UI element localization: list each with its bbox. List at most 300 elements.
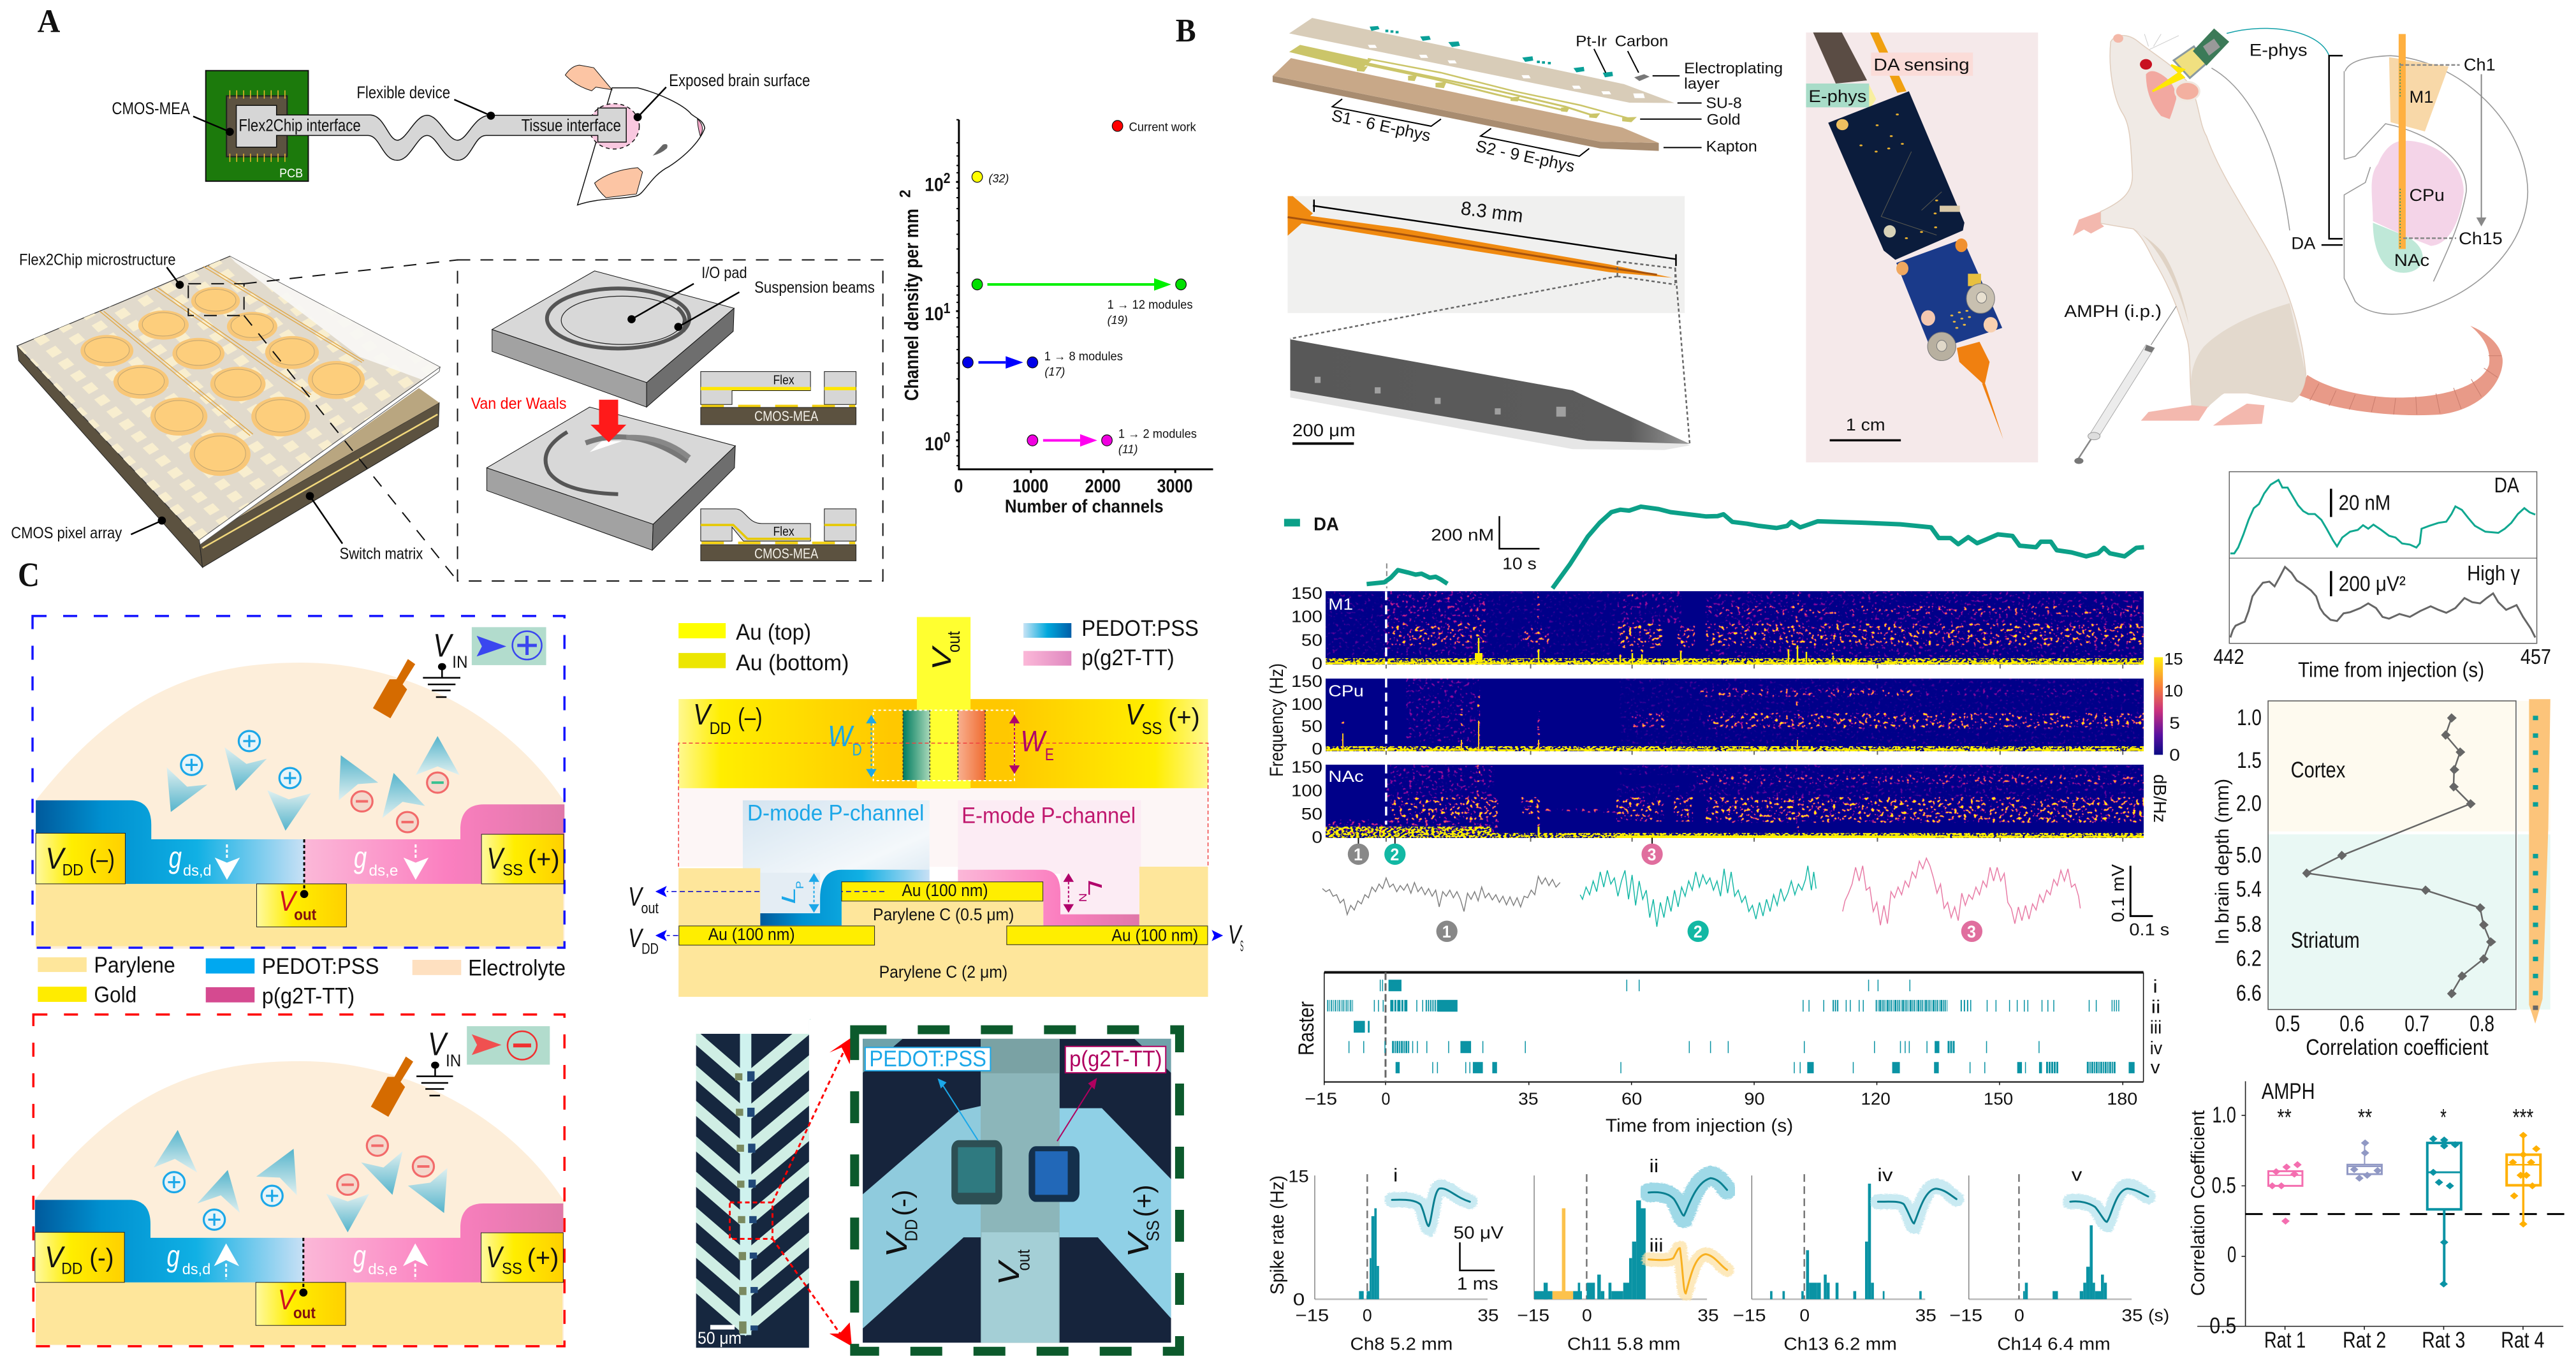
Vout label: out: [294, 905, 317, 923]
VDD terminal arrow: V: [628, 923, 643, 953]
label CMOS-MEA: [112, 99, 234, 136]
waveform labels: iii: [1649, 1235, 1664, 1256]
y axis tick labels: 0: [944, 430, 950, 446]
trace labels and scale bars: [2331, 474, 2520, 596]
waveform labels: [1393, 1156, 2082, 1256]
spectrogram NAc: [1326, 765, 2144, 838]
legend: materials: Parylene: [94, 952, 175, 978]
legend: materials: Gold: [94, 982, 136, 1007]
region labels: Cortex: [2291, 757, 2346, 783]
rotated terminal labels: SS: [1143, 1220, 1163, 1241]
chart: DA trace: DA: [1314, 514, 1339, 534]
VSS label: V: [487, 842, 506, 876]
depth tick labels: 5.4: [2236, 876, 2262, 902]
rat head with exposed brain: [566, 65, 705, 205]
rotated terminal labels: V: [1122, 1230, 1155, 1258]
cross-section labels: Au (100 nm): [1111, 926, 1198, 945]
raster plot: [1305, 973, 2162, 1136]
DA trace: [2230, 480, 2535, 554]
x axis title: Number of channels: [1005, 497, 1164, 517]
electrode icon: [373, 659, 415, 718]
probe track: [2399, 34, 2406, 249]
VSS label: [486, 1240, 559, 1277]
channel labels: Ch13 6.2 mm: [1783, 1334, 1897, 1354]
LP dimension: [779, 873, 819, 913]
y axis tick labels: 1: [944, 300, 950, 316]
frequency tick labels M1: 0: [1312, 654, 1322, 673]
histogram tick labels: −15: [1949, 1305, 1982, 1325]
depth tick labels: 6.6: [2236, 980, 2262, 1006]
Kapton layer: [1273, 58, 1658, 151]
DA line: [1366, 506, 2144, 589]
label Flexible device: Flexible device: [356, 83, 450, 102]
trace labels and scale bars: 20 nM: [2339, 492, 2390, 515]
rotated terminal labels: (-): [888, 1190, 918, 1216]
VSS label: SS: [1142, 719, 1162, 739]
channel conductance gds,d: ds,d: [183, 862, 212, 879]
E-mode channel region: E-mode P-channel: [962, 803, 1136, 828]
VIN ground symbol: [423, 627, 467, 697]
channel conductance gds,e: [353, 1240, 428, 1279]
significance stars: **: [2358, 1105, 2372, 1131]
atlas labels and leaders: M1: [2409, 87, 2433, 107]
dimension 8.3 mm line: [1313, 200, 1676, 266]
x axis tick labels: [954, 475, 1193, 497]
label CMOS pixel array: [11, 517, 166, 541]
spike rate histograms: [1288, 1156, 2169, 1354]
frequency tick labels NAc: 50: [1301, 805, 1322, 823]
VDD label: V: [693, 698, 713, 731]
label I/O pad: I/O pad: [701, 264, 747, 282]
depth tick labels: 5.0: [2236, 842, 2262, 867]
panel letter B: B: [1176, 12, 1196, 48]
box plot: correlation per rat: [2197, 1078, 2565, 1353]
legend: Au and polymers: Au (bottom): [736, 650, 849, 675]
channel conductance gds,e: ds,e: [368, 1260, 397, 1278]
VDD terminal arrow: DD: [641, 939, 659, 957]
E-phys cable and DA lead: [2211, 28, 2329, 230]
panel C: negative input circuit schematic: [33, 1015, 564, 1346]
chart: DA trace: [1284, 506, 2144, 589]
y axis tick labels: 10: [925, 433, 944, 455]
rat body: [2100, 36, 2306, 407]
waveform iv: [1878, 1186, 1956, 1226]
axes: [956, 120, 1213, 473]
histogram tick labels: 35: [2121, 1305, 2143, 1325]
rat tail: [2297, 326, 2503, 415]
labels S1, S2, 8.3 mm: 8.3 mm: [1460, 198, 1525, 227]
significance stars: [2277, 1105, 2533, 1131]
frequency tick labels CPu: 0: [1312, 740, 1322, 758]
VSS label: (+): [1168, 703, 1200, 732]
Vout terminal arrow: [628, 882, 884, 916]
frequency tick labels CPu: 100: [1291, 695, 1322, 714]
ion drift arrows: [166, 736, 460, 831]
time axis labels: [2213, 646, 2551, 682]
text: S: [1240, 937, 1243, 955]
unit iv: [1349, 1041, 2039, 1053]
panel B: headstage photo: [1806, 33, 2038, 462]
VSS label: [1125, 698, 1200, 739]
region labels: M1: [1328, 596, 1353, 614]
rat head details: [2113, 34, 2199, 119]
box Rat 1: [2268, 1161, 2302, 1225]
pad suspension rings: [85, 289, 360, 471]
zoom box dashes: [188, 260, 883, 581]
label Flex2Chip microstructure: [19, 251, 184, 289]
frequency tick labels NAc: [1291, 758, 1322, 846]
annotation labels: 1 → 8 modules: [1044, 349, 1123, 364]
threshold dashed line: [2246, 1213, 2565, 1215]
frequency tick labels M1: 100: [1291, 608, 1322, 626]
screws: [1928, 284, 1994, 361]
box Rat 3: [2427, 1135, 2461, 1288]
frequency tick labels M1: [1291, 585, 1322, 673]
orange unit iii bars: [1553, 1209, 1573, 1299]
cross-section labels: Parylene C (2 μm): [879, 963, 1007, 982]
VDD label: (–): [738, 703, 763, 732]
cross-section: before contact: CMOS-MEA: [754, 408, 819, 424]
layer labels and leaders: Pt-Ir: [1576, 33, 1607, 50]
anion symbols: [351, 772, 448, 832]
legend: Au and polymers: PEDOT:PSS: [1081, 615, 1199, 641]
brackets S1 S2: [1332, 99, 1589, 156]
LP dimension: L: [779, 887, 800, 904]
Vout label: V: [279, 885, 298, 917]
rotated terminal labels: (+): [1129, 1185, 1159, 1217]
label E-phys: E-phys: [2250, 40, 2308, 59]
trace badges: 2: [1694, 922, 1702, 941]
unit labels: v: [2151, 1057, 2160, 1077]
WD dimension: W: [828, 719, 854, 753]
VSS terminal arrow: [1211, 920, 1243, 955]
NAc region: [2373, 223, 2423, 273]
raster tick labels: 0: [1381, 1089, 1390, 1109]
box Rat 4: [2506, 1132, 2540, 1228]
interconnect tracks: [99, 266, 364, 436]
legend: Au and polymers: p(g2T-TT): [1081, 645, 1175, 670]
channel conductance gds,d: g: [169, 841, 182, 875]
depth tick labels: 1.5: [2237, 747, 2262, 773]
labels S1, S2, 8.3 mm: [1330, 106, 1577, 227]
VIN ground symbol: V: [433, 627, 454, 663]
frequency tick labels M1: 150: [1291, 585, 1322, 603]
x axis tick labels: 0: [954, 475, 963, 497]
x axis tick labels: 1000: [1013, 475, 1048, 497]
gold traces layer: [1289, 45, 1637, 122]
correlation tick labels and title: 0.6: [2339, 1011, 2364, 1036]
y axis title: depth: In brain depth (mm): [2212, 779, 2233, 945]
label Switch matrix: [306, 492, 423, 563]
VDD label: V: [45, 842, 66, 876]
raster tick labels: 120: [1861, 1089, 1891, 1109]
cross-section: after contact: [701, 509, 856, 561]
atlas labels and leaders: CPu: [2409, 186, 2445, 205]
annotation labels: (19): [1108, 314, 1128, 327]
colorbar: 5: [2169, 714, 2180, 732]
colorbar: 10: [2164, 682, 2183, 700]
waveform v: [2070, 1186, 2148, 1225]
region backgrounds: [2268, 701, 2550, 1010]
y axis title: 2: [896, 189, 914, 198]
scale bar 50 um: 50 μm: [698, 1329, 742, 1348]
SEM image of probe tip: [1290, 339, 1690, 450]
VSS label: (+): [528, 844, 560, 873]
histogram tick labels: −15: [1295, 1305, 1329, 1325]
x axis tick labels: 3000: [1157, 475, 1193, 497]
callout p(g2T-TT): p(g2T-TT): [1069, 1046, 1162, 1071]
significance stars: **: [2277, 1105, 2292, 1131]
y axis tick labels: 10: [925, 303, 944, 325]
channel span arrow: [2399, 65, 2486, 238]
rat labels: Rat 3: [2422, 1327, 2465, 1353]
arrow: Van der Waals: [590, 400, 626, 442]
correlation tick labels and title: [2276, 1011, 2494, 1060]
time axis labels: Time from injection (s): [2298, 659, 2484, 682]
colorbar title: dB/Hz: [2150, 774, 2170, 823]
histogram tick labels: 15: [1288, 1166, 1309, 1186]
cross-section labels: Au (100 nm): [902, 881, 988, 901]
histogram tick labels: −15: [1517, 1305, 1549, 1325]
legend: positive input: [472, 627, 546, 665]
anion symbols: [337, 1136, 434, 1195]
label Suspension beams: Suspension beams: [754, 278, 875, 297]
histogram tick labels: 0: [2014, 1305, 2024, 1325]
VDD label: [45, 842, 115, 879]
unit labels: ii: [2151, 997, 2160, 1017]
E-phys label: [1806, 84, 1869, 107]
Flex2Chip pads: [80, 287, 365, 476]
panel B: rat with implant and brain atlas: [2064, 28, 2528, 464]
histogram Ch8: [1359, 1209, 1379, 1299]
tick labels: [2209, 1102, 2236, 1338]
LN dimension: L: [1084, 880, 1106, 897]
x axis tick labels: 2000: [1085, 475, 1121, 497]
time markers 1 2 3: [1348, 838, 1663, 865]
channel labels: [1350, 1334, 2111, 1354]
correlation tick labels and title: 0.5: [2276, 1011, 2300, 1036]
correlation vs depth chart: [2236, 699, 2550, 1060]
histogram tick labels: 0: [1363, 1305, 1372, 1325]
atlas labels and leaders: NAc: [2394, 251, 2429, 270]
DA and high gamma comparison: [2213, 472, 2551, 682]
scale bar 1 cm: 1 cm: [1846, 415, 1885, 434]
rat labels: Rat 1: [2264, 1327, 2306, 1353]
Vout rotated label: out: [943, 631, 963, 652]
colorbar: 0: [2169, 746, 2180, 764]
box Rat 2: [2348, 1140, 2382, 1182]
depth tick labels: [2236, 705, 2262, 1006]
spectrogram M1: [1326, 591, 2144, 665]
rotated terminal labels: [880, 1185, 1163, 1286]
high gamma trace: [2230, 567, 2535, 638]
histogram tick labels: 35: [1477, 1305, 1499, 1325]
cross-section: before contact: [701, 372, 856, 425]
trace labels and scale bars: DA: [2494, 474, 2520, 497]
frequency tick labels CPu: [1291, 672, 1322, 758]
layer labels and leaders: layer: [1684, 75, 1720, 92]
LFP scale bar: 0.1 s: [2129, 920, 2169, 939]
LFP trace 2: [1580, 866, 1816, 927]
channel conductance gds,d: g: [166, 1240, 180, 1273]
D-mode channel region: [743, 800, 930, 883]
LN dimension: N: [1077, 893, 1088, 902]
waveform i: [1392, 1187, 1470, 1228]
E-mode channel region: [958, 800, 1141, 874]
waveform labels: ii: [1649, 1156, 1658, 1176]
Vout rotated label: V: [927, 645, 957, 670]
CPu region: [2372, 141, 2464, 246]
raster tick labels: 90: [1744, 1089, 1765, 1109]
label Flexible device: [356, 83, 495, 120]
injection markers: [1385, 591, 1387, 825]
head implant: [2153, 29, 2229, 91]
label CMOS-MEA: CMOS-MEA: [112, 99, 190, 118]
waveform iii: [1649, 1248, 1727, 1293]
red zoom box and arrows: [730, 1038, 852, 1346]
tick labels: 0.5: [2212, 1172, 2236, 1198]
chart: channel density vs number of channels: [896, 12, 1213, 517]
y axis title: Spike rate: Spike rate (Hz): [1267, 1175, 1288, 1295]
micrograph: transistor array: [687, 1020, 819, 1354]
cation symbols: [181, 731, 300, 788]
rat labels: [2264, 1327, 2544, 1353]
label Exposed brain surface: Exposed brain surface: [669, 71, 810, 90]
correlation tick labels and title: Correlation coefficient: [2306, 1034, 2489, 1060]
VDD label: [45, 1240, 114, 1277]
spike rate histograms: 50 μV: [1453, 1223, 1504, 1242]
label Flex2Chip interface: Flex2Chip interface: [238, 116, 361, 135]
x ticks: [1386, 665, 2123, 842]
trace badges: 3: [1967, 922, 1976, 941]
rotated terminal labels: DD: [901, 1219, 921, 1241]
DA legend: [1284, 514, 1339, 534]
atlas labels and leaders: [2291, 55, 2503, 270]
E-phys label: E-phys: [1808, 87, 1866, 106]
PCB with CMOS-MEA chip: [206, 71, 308, 181]
legend: Au and polymers: Au (top): [736, 619, 811, 645]
layer labels and leaders: Carbon: [1615, 33, 1668, 50]
tick labels: 0.5: [2209, 1313, 2236, 1338]
top view of gold electrodes: [678, 617, 1208, 867]
atlas labels and leaders: Ch1: [2464, 55, 2496, 74]
colorbar: 15: [2164, 650, 2183, 668]
cross-section: before contact: Flex: [773, 372, 794, 387]
VSS label: V: [486, 1240, 504, 1274]
cross-section stack: [678, 867, 1208, 997]
layer labels and leaders: Electroplating: [1684, 59, 1783, 77]
annotation labels: 1 → 2 modules: [1118, 427, 1197, 441]
cross-section labels: Au (100 nm): [708, 925, 795, 945]
VIN ground symbol: IN: [446, 1052, 461, 1070]
label Switch matrix: Switch matrix: [340, 545, 423, 563]
y axis tick labels: [925, 170, 950, 455]
histogram tick labels: 0: [1582, 1305, 1592, 1325]
cross-section labels: Parylene C (0.5 μm): [873, 906, 1014, 925]
trace labels and scale bars: 200 μV²: [2339, 573, 2406, 596]
Vout label: [279, 885, 317, 923]
ion drift arrows: [154, 1130, 448, 1232]
WE dimension: [1009, 715, 1054, 774]
Vout label: V: [278, 1283, 297, 1316]
upper microstructure block: [492, 271, 734, 407]
circuit boards: [1828, 91, 2002, 351]
label Van der Waals: Van der Waals: [471, 394, 566, 413]
spectrogram axes, colorbar and LFP traces: [1291, 585, 2183, 942]
text: iii: [2150, 1017, 2162, 1038]
raster tick labels: 35: [1518, 1089, 1539, 1109]
scale label 0.1 mV: 0.1 mV: [2108, 864, 2128, 922]
histogram tick labels: [1288, 1166, 2169, 1325]
trace badges: [1437, 921, 1982, 942]
depth tick labels: 6.2: [2236, 945, 2262, 971]
channel conductance gds,e: ds,e: [369, 862, 398, 879]
cross-section: after contact: CMOS-MEA: [754, 545, 819, 561]
M1 region: [2389, 57, 2448, 131]
VSS terminal arrow: V: [1228, 920, 1243, 949]
layer labels and leaders: [1576, 33, 1783, 155]
atlas labels and leaders: Ch15: [2459, 229, 2503, 248]
waveform labels: i: [1393, 1165, 1398, 1186]
annotation labels: Current work: [1129, 120, 1196, 134]
histogram tick labels: 0: [1799, 1305, 1810, 1325]
y axis title: correlation: Correlation Coefficient: [2188, 1110, 2209, 1296]
unit v: [1396, 1062, 2135, 1073]
layer labels and leaders: Gold: [1707, 111, 1740, 128]
channel conductance gds,e: g: [354, 841, 367, 875]
label Suspension beams: [674, 278, 875, 331]
correlation tick labels and title: 0.8: [2470, 1011, 2494, 1036]
scale bar 200 nM / 10 s: [1431, 516, 1539, 573]
raster tick labels: 60: [1621, 1089, 1642, 1109]
y axis title: Frequency: Frequency (Hz): [1266, 663, 1287, 777]
cables: [1813, 33, 1906, 107]
lower microstructure block: [487, 407, 735, 550]
panel letter A: A: [38, 3, 61, 40]
device stack: sheet over CMOS pixel array: [17, 256, 440, 568]
legend: materials: [38, 952, 566, 1008]
VDD label: [693, 698, 763, 739]
histogram tick labels: 35: [1697, 1305, 1719, 1325]
label Tissue interface: Tissue interface: [522, 116, 621, 135]
text: iv: [2150, 1038, 2162, 1058]
VIN ground symbol: IN: [452, 653, 467, 672]
region labels: Striatum: [2291, 927, 2360, 953]
panel C: device layout and cross-section: [628, 615, 1243, 1354]
Vout terminal arrow: V: [628, 882, 643, 911]
raster plot: Time from injection (s): [1606, 1115, 1793, 1136]
DA sensing label: DA sensing: [1873, 55, 1970, 74]
panel A: flexible interface schematic: [11, 3, 883, 581]
channel labels: Ch11 5.8 mm: [1567, 1334, 1680, 1354]
scale bar 1 cm: [1830, 415, 1901, 441]
rotated terminal labels: V: [992, 1259, 1025, 1286]
waveform labels: iv: [1877, 1165, 1892, 1186]
raster tick labels: 150: [1984, 1089, 2013, 1109]
channel conductance gds,d: ds,d: [182, 1260, 210, 1278]
spectrogram CPu: [1326, 679, 2144, 751]
VDD label: DD: [62, 860, 84, 879]
time markers 1 2 3: 2: [1390, 845, 1399, 864]
unit iii: [1354, 1021, 1370, 1033]
histogram tick labels: 35: [1915, 1305, 1936, 1325]
rotated terminal labels: V: [880, 1230, 913, 1258]
callout PEDOT:PSS: PEDOT:PSS: [869, 1046, 986, 1071]
VDD label: V: [45, 1240, 66, 1274]
callout p(g2T-TT): [1057, 1046, 1166, 1141]
Vout label: [278, 1283, 316, 1322]
scale bar 200 um: 200 μm: [1292, 420, 1356, 440]
